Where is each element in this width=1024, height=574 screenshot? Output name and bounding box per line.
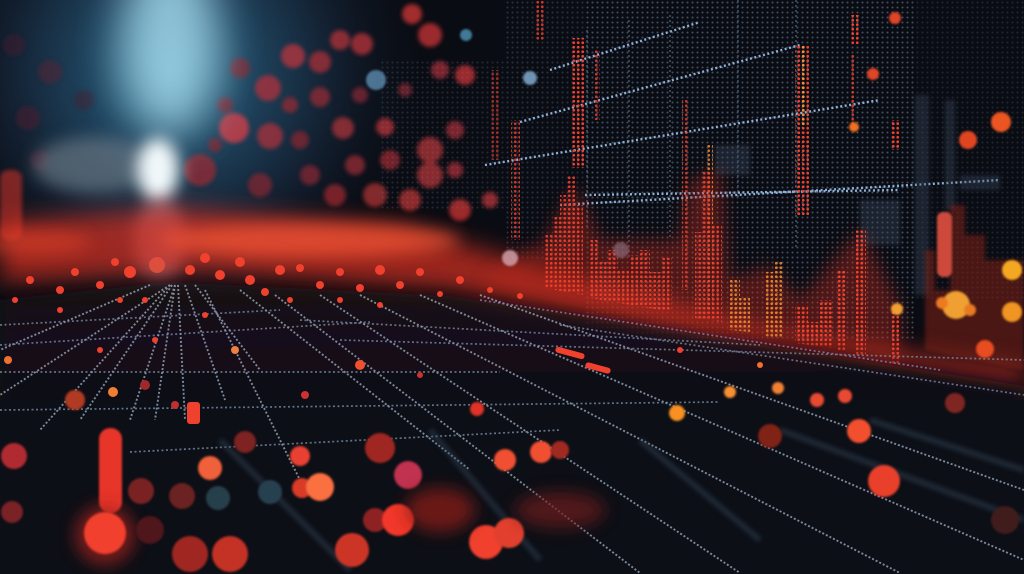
red glow band (0, 208, 1024, 392)
white light beam (33, 0, 218, 280)
floor perspective grid (0, 285, 1024, 573)
data wall dot grid (380, 0, 1024, 340)
floor radial lines (0, 285, 1024, 573)
right blurred columns (925, 205, 1024, 370)
data bar columns (480, 0, 1024, 370)
skyline of dotted bars (545, 170, 722, 322)
data wall soft panels (715, 95, 1000, 295)
floor cross lines (0, 300, 1024, 452)
floor sparks (4, 253, 763, 424)
bottom bokeh lights (1, 382, 1019, 572)
upper right bokeh lights (366, 12, 1022, 358)
data wall blue lines (485, 22, 1000, 205)
red bokeh cloud (0, 4, 498, 240)
data wall vertical lines (587, 0, 796, 260)
floor surface (0, 282, 1024, 574)
floor blurred lines (220, 420, 1024, 570)
skyline glow (480, 170, 900, 370)
blue light haze (0, 0, 560, 300)
